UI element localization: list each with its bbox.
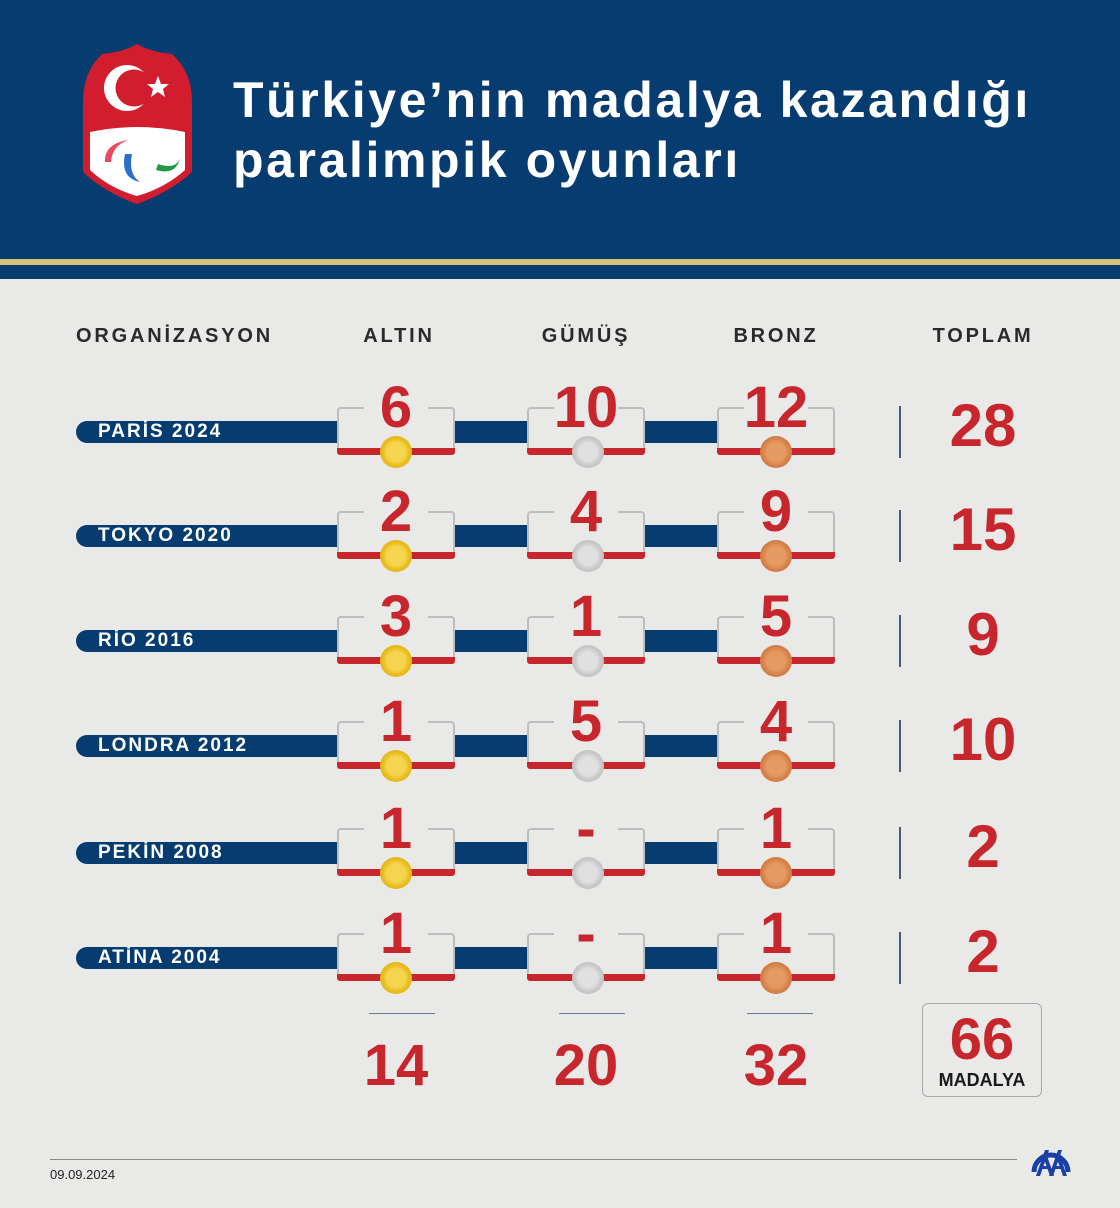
row: Pekin 2008: 2 (966, 813, 1000, 880)
column sums (364, 1013, 813, 1098)
row: Paris 2024: 10 (554, 375, 618, 440)
total box: 66 madalya: MADALYA (939, 1070, 1025, 1090)
row: Londra 2012: 1 (380, 689, 412, 754)
row: Tokyo 2020: 9 (760, 479, 792, 544)
row: Pekin 2008: PEKİN 2008 (98, 842, 224, 863)
column headers: ORGANİZASYON (76, 325, 273, 347)
row: Paris 2024: 28 (950, 392, 1016, 459)
row: Atina 2004: ATİNA 2004 (98, 947, 221, 968)
row: Londra 2012: 5 (570, 689, 602, 754)
date: 09.09.2024 (50, 1167, 115, 1182)
row: Pekin 2008: 1 (380, 796, 412, 861)
footer line (50, 1159, 1017, 1160)
row: Londra 2012 (76, 689, 1016, 782)
title: paralimpik oyunları (233, 132, 741, 188)
column headers: ALTIN (363, 325, 435, 347)
column sums: 14 (364, 1033, 428, 1098)
row: Tokyo 2020: TOKYO 2020 (98, 525, 233, 546)
row: Paris 2024: 12 (744, 375, 808, 440)
row: Rio 2016: RİO 2016 (98, 630, 195, 651)
title: Türkiye’nin madalya kazandığı (233, 72, 1031, 128)
row: Atina 2004: 1 (760, 901, 792, 966)
row: Tokyo 2020: 4 (570, 479, 602, 544)
column headers: GÜMÜŞ (542, 325, 630, 347)
title (233, 72, 1031, 188)
row: Paris 2024 (76, 375, 1016, 468)
column headers (76, 324, 1033, 347)
total box: 66 madalya (922, 1003, 1042, 1097)
row: Rio 2016: 9 (966, 601, 1000, 668)
row: Pekin 2008: - (576, 796, 596, 861)
row: Londra 2012: 10 (950, 706, 1016, 773)
column sums: 20 (554, 1033, 618, 1098)
row: Pekin 2008 (76, 796, 1000, 889)
row: Rio 2016: 5 (760, 584, 792, 649)
row: Rio 2016 (76, 584, 1000, 677)
column sums: 32 (744, 1033, 808, 1098)
row: Londra 2012: LONDRA 2012 (98, 735, 248, 756)
row: Tokyo 2020: 15 (950, 496, 1016, 563)
column headers: TOPLAM (933, 325, 1033, 347)
row: Tokyo 2020 (76, 479, 1016, 572)
icon: AA logo (1032, 1150, 1070, 1176)
column headers: BRONZ (733, 325, 819, 347)
row: Atina 2004: 2 (966, 918, 1000, 985)
row: Londra 2012: 4 (760, 689, 792, 754)
row: Rio 2016: 3 (380, 584, 412, 649)
row: Atina 2004 (76, 901, 1000, 994)
row: Rio 2016: 1 (570, 584, 602, 649)
header band (0, 0, 1120, 279)
total box: 66 madalya: 66 (950, 1007, 1014, 1072)
row: Atina 2004: - (576, 901, 596, 966)
row: Atina 2004: 1 (380, 901, 412, 966)
row: Tokyo 2020: 2 (380, 479, 412, 544)
row: Paris 2024: PARİS 2024 (98, 421, 222, 442)
row: Paris 2024: 6 (380, 375, 412, 440)
row: Pekin 2008: 1 (760, 796, 792, 861)
logo: Turkish paralympic committee (83, 44, 192, 204)
